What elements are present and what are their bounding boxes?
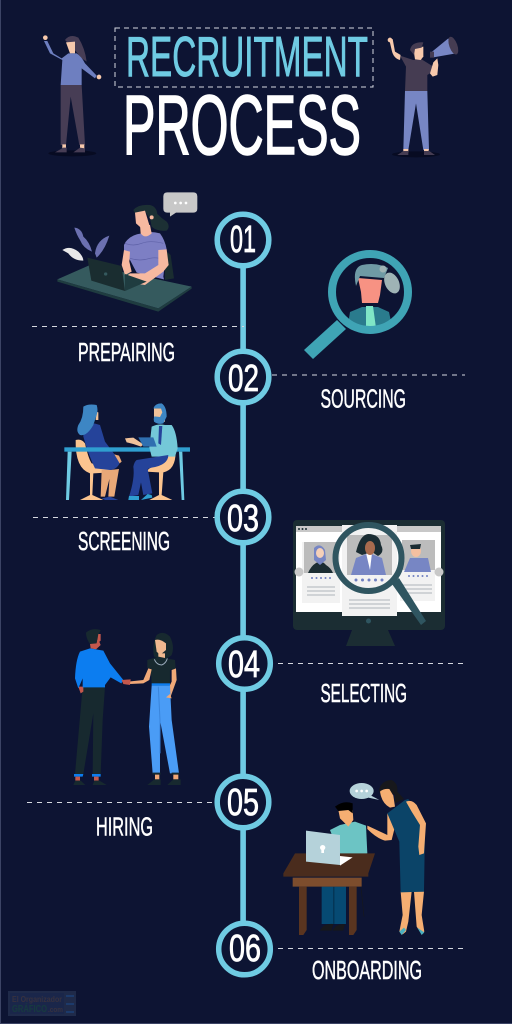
step 01 badge	[217, 214, 269, 266]
label: preparing: PREPAIRING	[78, 337, 175, 367]
label: selecting: SELECTING	[320, 678, 407, 708]
step 04 badge	[219, 638, 270, 689]
step 01 badge: 01	[230, 219, 256, 261]
watermark logo: GRÁFICO	[12, 1002, 47, 1015]
icon: handshake between two people	[73, 629, 181, 785]
step 06 badge: 06	[229, 928, 261, 970]
step 02 badge: 02	[228, 358, 259, 400]
step 03 badge: 03	[227, 498, 259, 540]
step 04 badge: 04	[228, 644, 260, 686]
watermark logo: El Organizador	[12, 995, 62, 1004]
icon: man with megaphone	[388, 36, 460, 157]
icon: onboarding at desk	[283, 780, 426, 935]
step 05 badge	[217, 776, 269, 828]
step 02 badge	[217, 351, 269, 403]
step 03 badge	[217, 491, 269, 543]
icon: interview at table	[64, 403, 190, 500]
icon: magnifier with candidate	[304, 254, 408, 359]
connector: step 05	[27, 802, 214, 804]
label: sourcing: SOURCING	[320, 384, 406, 414]
icon: candidate profiles on monitor	[293, 520, 445, 646]
connector: step 01	[32, 326, 244, 328]
title	[115, 25, 373, 172]
connector: step 04	[278, 662, 465, 664]
step 06 badge	[219, 923, 270, 975]
connector: step 02	[272, 374, 465, 376]
label: onboarding: ONBOARDING	[312, 955, 422, 985]
label: screening: SCREENING	[78, 526, 170, 556]
label: hiring: HIRING	[96, 812, 153, 842]
connector: step 06	[278, 948, 465, 950]
timeline line	[240, 268, 246, 922]
connector: step 03	[33, 516, 215, 518]
watermark logo: .com	[48, 1007, 63, 1014]
step 05 badge: 05	[227, 782, 259, 824]
icon: woman waving	[43, 35, 101, 156]
watermark logo	[8, 991, 76, 1016]
icon: woman at laptop	[57, 192, 197, 312]
